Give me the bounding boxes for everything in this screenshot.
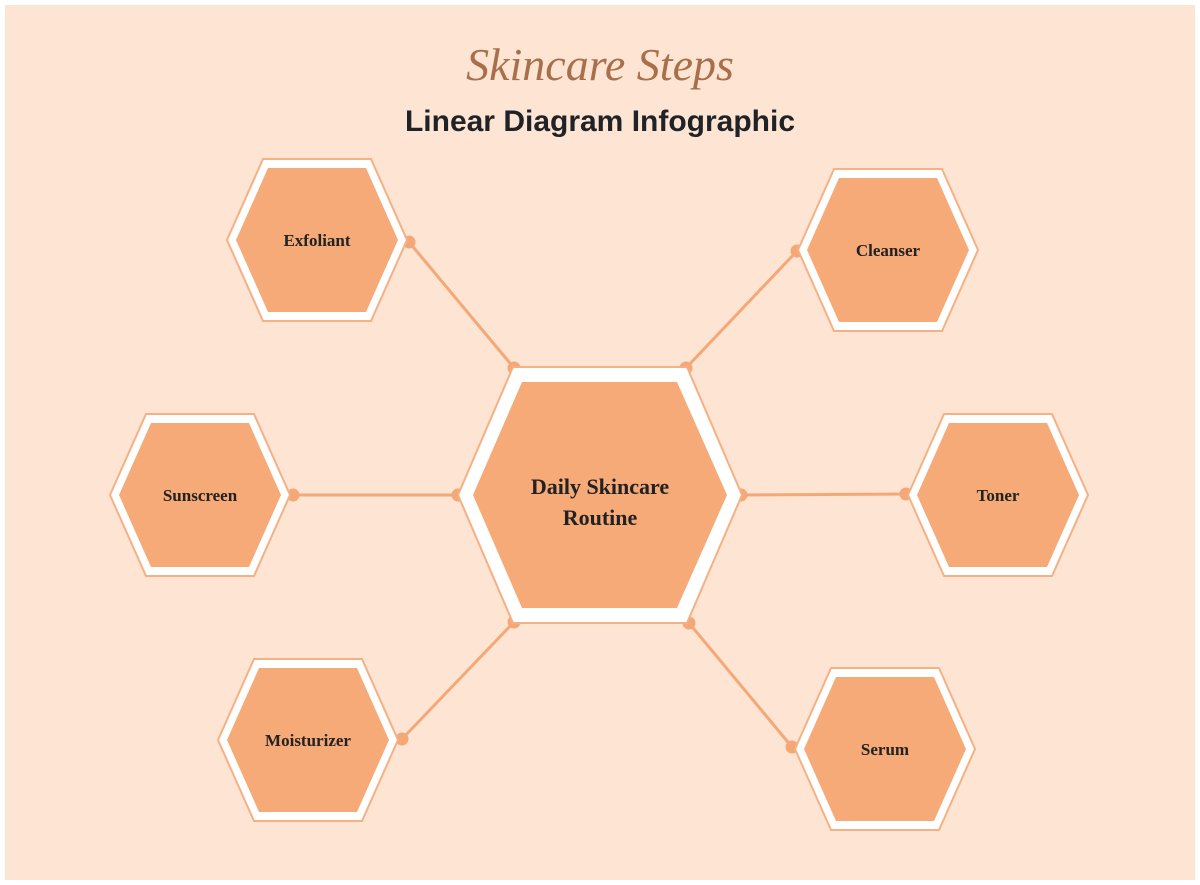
center hexagon	[458, 367, 742, 623]
hexagon: Exfoliant: Exfoliant	[283, 231, 351, 250]
hexagon: Serum: Serum	[861, 740, 909, 759]
hexagon: Toner	[908, 414, 1088, 576]
hexagon: Sunscreen	[110, 414, 290, 576]
hexagon: Exfoliant	[227, 159, 407, 321]
center hexagon: Daily Skincare	[531, 474, 669, 499]
hexagon: Sunscreen: Sunscreen	[163, 486, 238, 505]
hexagon: Toner: Toner	[977, 486, 1020, 505]
connectors	[288, 237, 911, 752]
hexagon: Cleanser	[798, 169, 978, 331]
hexagon: Serum	[795, 668, 975, 830]
hexagon: Moisturizer: Moisturizer	[265, 731, 351, 750]
center hexagon: Routine	[563, 505, 638, 530]
title: Skincare Steps	[466, 39, 734, 90]
subtitle: Linear Diagram Infographic	[405, 105, 795, 138]
hexagon: Moisturizer	[218, 659, 398, 821]
hexagon: Cleanser: Cleanser	[856, 241, 921, 260]
